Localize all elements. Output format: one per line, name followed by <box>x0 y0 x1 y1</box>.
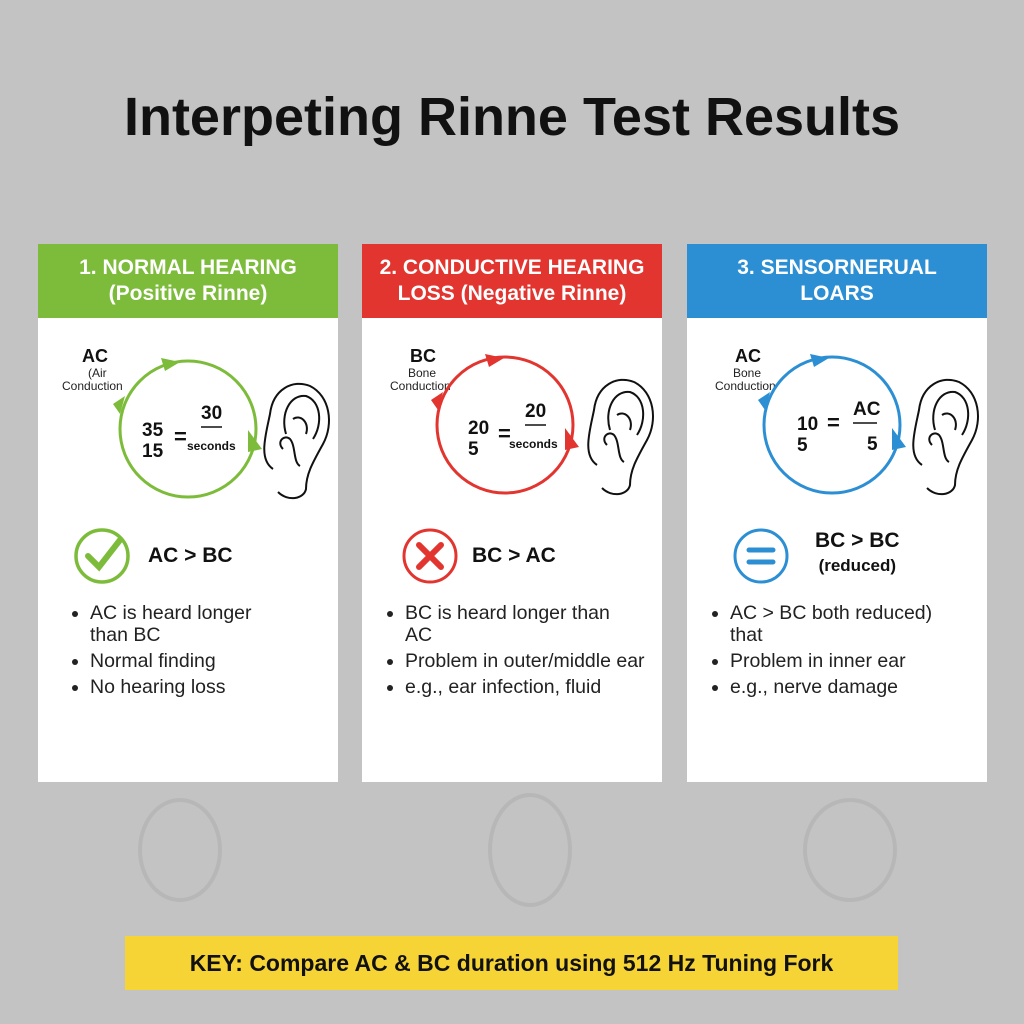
faded ears <box>138 793 897 907</box>
diagram: BC circle: seconds <box>509 437 558 451</box>
diagram: BC circle: 20 <box>525 401 546 422</box>
icon: cross <box>402 528 458 584</box>
bullets <box>387 602 645 698</box>
bullets: No hearing loss <box>90 676 226 698</box>
diagram: AC circle: seconds <box>187 439 236 453</box>
header: conductive: LOSS (Negative Rinne) <box>398 282 626 305</box>
diagram: AC circle: Conduction <box>715 379 776 393</box>
bullets: Problem in outer/middle ear <box>405 650 645 672</box>
icon: equals <box>734 528 788 584</box>
diagram: AC circle: AC <box>853 399 881 420</box>
bullets: BC is heard longer than <box>405 602 610 624</box>
diagram: BC circle: 20 <box>468 418 489 439</box>
result: BC > BC: (reduced) <box>819 556 896 575</box>
result: AC > BC: AC > BC <box>148 544 233 567</box>
diagram: AC circle: 5 <box>797 435 808 456</box>
key banner: KEY: Compare AC & BC duration using 512 Hz Tuning Fork <box>190 950 833 976</box>
diagram: AC circle: AC <box>82 346 108 366</box>
icon: check <box>74 528 130 584</box>
diagram: AC circle: = <box>174 424 187 449</box>
diagram: AC circle: 10 <box>797 414 818 435</box>
panel: conductive <box>362 244 662 782</box>
panel: sensorineural <box>687 244 987 782</box>
bullets: e.g., ear infection, fluid <box>405 676 601 698</box>
header: conductive <box>362 244 662 318</box>
diagram: BC circle: 5 <box>468 439 479 460</box>
diagram: AC circle: = <box>827 410 840 435</box>
diagram: AC circle <box>715 346 979 496</box>
bullets: e.g., nerve damage <box>730 676 898 698</box>
key banner <box>125 936 898 990</box>
result: BC > BC: BC > BC <box>815 529 900 552</box>
diagram: AC circle: 35 <box>142 420 164 441</box>
bullets: AC is heard longer <box>90 602 252 624</box>
bullets <box>712 602 932 698</box>
bullets: Normal finding <box>90 650 216 672</box>
result: BC > AC: BC > AC <box>472 544 556 567</box>
panel: normal hearing <box>38 244 338 782</box>
diagram: AC circle: AC <box>735 346 761 366</box>
header: normal hearing: 1. NORMAL HEARING <box>79 256 297 279</box>
diagram: BC circle <box>390 346 654 496</box>
diagram: BC circle: = <box>498 421 511 446</box>
bullets: AC > BC both reduced) <box>730 602 932 624</box>
bullets: AC <box>405 624 432 646</box>
diagram: BC circle: Bone <box>408 366 436 380</box>
diagram: AC circle: 30 <box>201 403 222 424</box>
bullets: that <box>730 624 763 646</box>
diagram: AC circle <box>62 346 330 500</box>
header: sensorineural: 3. SENSORNERUAL <box>737 256 937 279</box>
header: normal hearing: (Positive Rinne) <box>109 282 267 305</box>
header: sensorineural <box>687 244 987 318</box>
diagram: AC circle: Conduction <box>62 379 123 393</box>
result: BC > BC <box>815 529 900 575</box>
diagram: AC circle: 5 <box>867 434 878 455</box>
bullets: than BC <box>90 624 160 646</box>
title: Interpeting Rinne Test Results <box>124 87 900 147</box>
diagram: BC circle: Conduction <box>390 379 451 393</box>
header: conductive: 2. CONDUCTIVE HEARING <box>380 256 644 279</box>
header: sensorineural: LOARS <box>800 282 874 305</box>
bullets: Problem in inner ear <box>730 650 906 672</box>
diagram: AC circle: (Air <box>88 366 107 380</box>
bullets <box>72 602 252 698</box>
diagram: BC circle: BC <box>410 346 436 366</box>
diagram: AC circle: 15 <box>142 441 164 462</box>
diagram: AC circle: Bone <box>733 366 761 380</box>
header: normal hearing <box>38 244 338 318</box>
